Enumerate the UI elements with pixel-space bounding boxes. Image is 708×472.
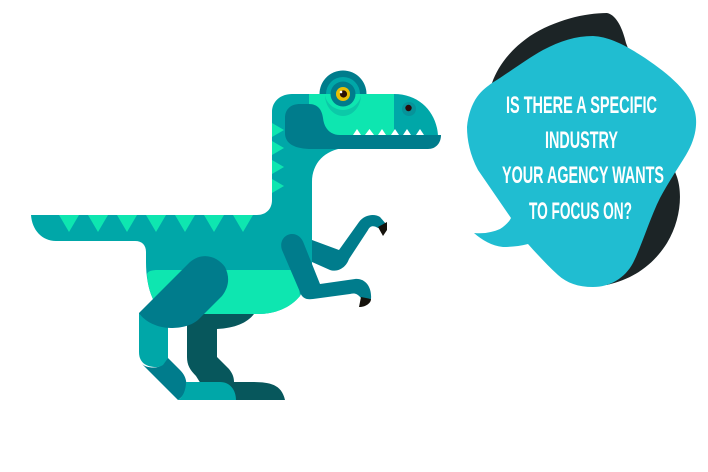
near arm (281, 234, 371, 299)
front foot (178, 382, 236, 400)
jaw (285, 104, 441, 149)
far arm (312, 215, 386, 271)
speech bubble (467, 13, 696, 287)
front foot link (142, 358, 186, 400)
dinosaur illustration (31, 70, 441, 400)
neck spikes (272, 123, 284, 193)
eye (330, 82, 356, 106)
neck inner curve (312, 148, 344, 182)
bubble text (502, 92, 664, 225)
bubble shadow (492, 13, 680, 285)
bubble text: TO FOCUS ON? (529, 198, 632, 225)
teeth (353, 129, 424, 135)
bubble body (467, 36, 696, 287)
bubble text: INDUSTRY (545, 127, 618, 154)
belly (147, 270, 300, 314)
eye stalk (320, 70, 366, 118)
front lower leg (139, 313, 168, 367)
tail and body (31, 94, 438, 314)
near arm claw (359, 297, 371, 307)
brow arc (325, 95, 361, 116)
head bright panel (309, 94, 394, 135)
far arm claw (378, 222, 387, 236)
back spikes (59, 215, 253, 232)
thigh (139, 256, 228, 328)
rear leg (187, 314, 285, 400)
nostril (402, 102, 416, 116)
